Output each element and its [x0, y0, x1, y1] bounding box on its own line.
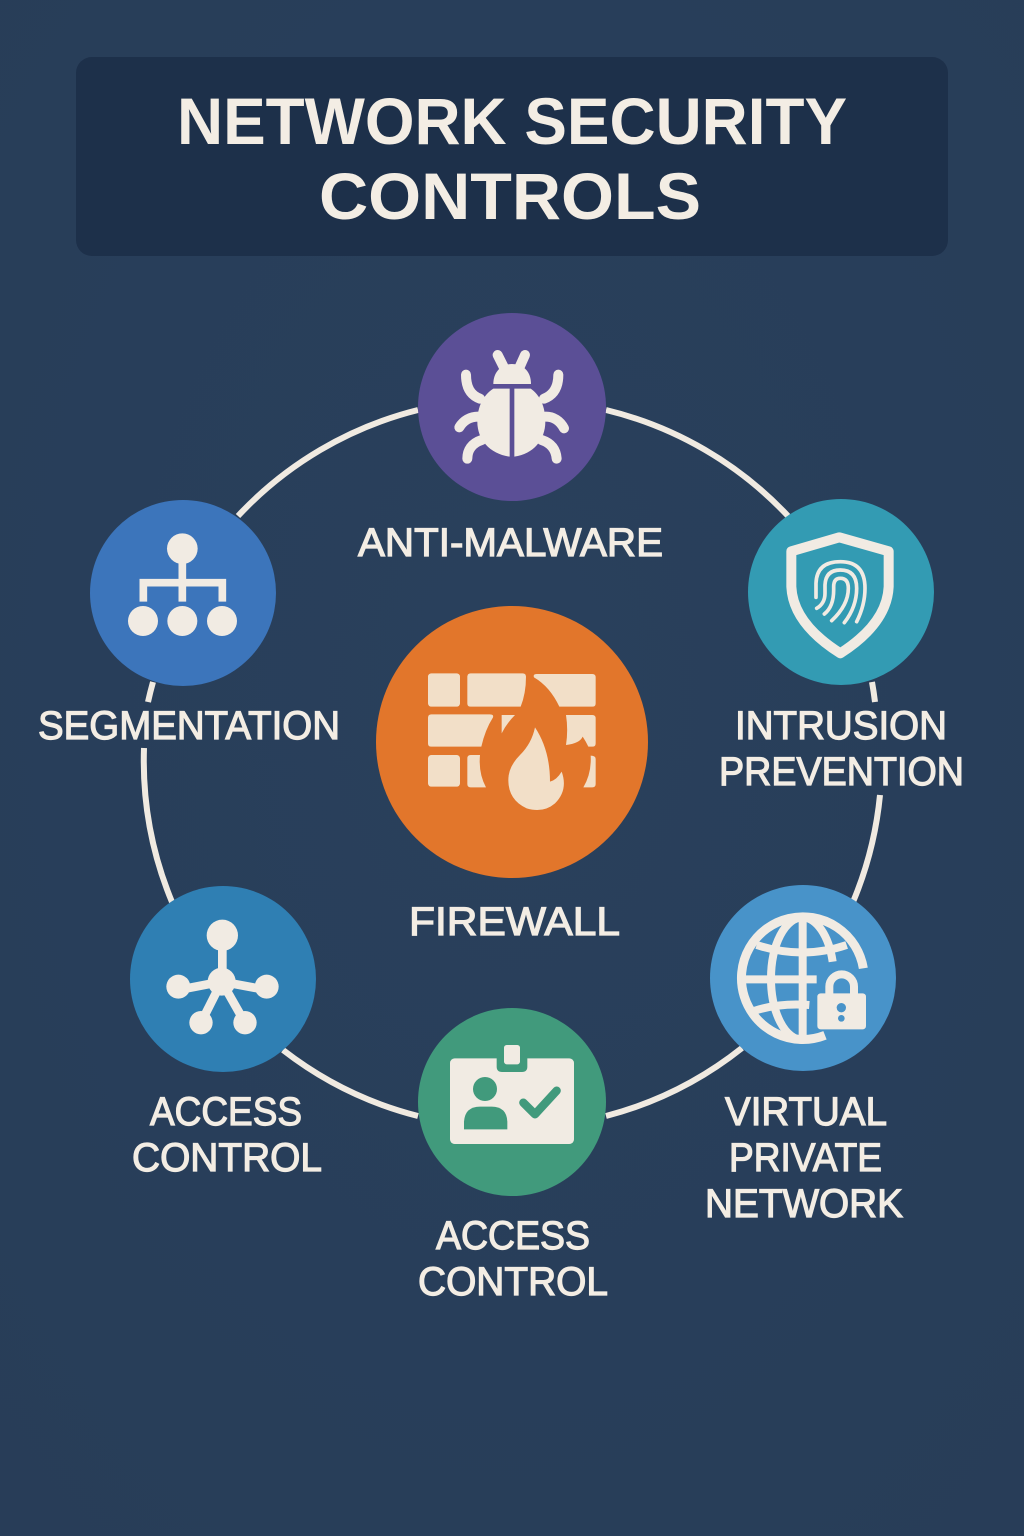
label: access control left: CONTROL — [132, 1136, 322, 1180]
node: anti-malware — [418, 313, 606, 501]
node: virtual private network — [710, 885, 896, 1071]
label: access control bottom: ACCESS — [436, 1214, 590, 1258]
icon: hierarchy — [128, 533, 237, 636]
connecting ring — [144, 410, 880, 1116]
node: access control hub — [130, 886, 316, 1072]
label: virtual private network: PRIVATE — [729, 1136, 882, 1180]
icon: brick wall with flame — [428, 673, 596, 810]
node: segmentation — [90, 500, 276, 686]
label: access control bottom: CONTROL — [418, 1260, 608, 1304]
icon: id badge with check — [450, 1045, 574, 1144]
icon: shield with fingerprint — [791, 537, 889, 653]
label: virtual private network: VIRTUAL — [725, 1090, 887, 1134]
icon: globe with padlock — [741, 917, 866, 1040]
icon: bug — [459, 355, 564, 459]
label: access control bottom — [418, 1214, 608, 1304]
title text: CONTROLS — [319, 159, 701, 233]
label: access control left: ACCESS — [150, 1090, 302, 1134]
label: anti-malware: ANTI-MALWARE — [358, 521, 663, 565]
label: firewall: FIREWALL — [409, 900, 620, 944]
icon: hub and spokes — [166, 920, 279, 1034]
node: access control badge — [418, 1008, 606, 1196]
label: intrusion prevention — [719, 704, 964, 794]
node: firewall — [376, 606, 648, 878]
label: intrusion prevention: PREVENTION — [719, 750, 964, 794]
node: intrusion prevention — [748, 499, 934, 685]
label: virtual private network — [705, 1090, 903, 1226]
title banner — [76, 57, 948, 256]
title text: NETWORK SECURITY — [177, 84, 847, 158]
label: intrusion prevention: INTRUSION — [735, 704, 947, 748]
label: segmentation: SEGMENTATION — [38, 704, 340, 748]
label: virtual private network: NETWORK — [705, 1182, 903, 1226]
title text — [177, 84, 847, 233]
label: access control left — [132, 1090, 322, 1180]
